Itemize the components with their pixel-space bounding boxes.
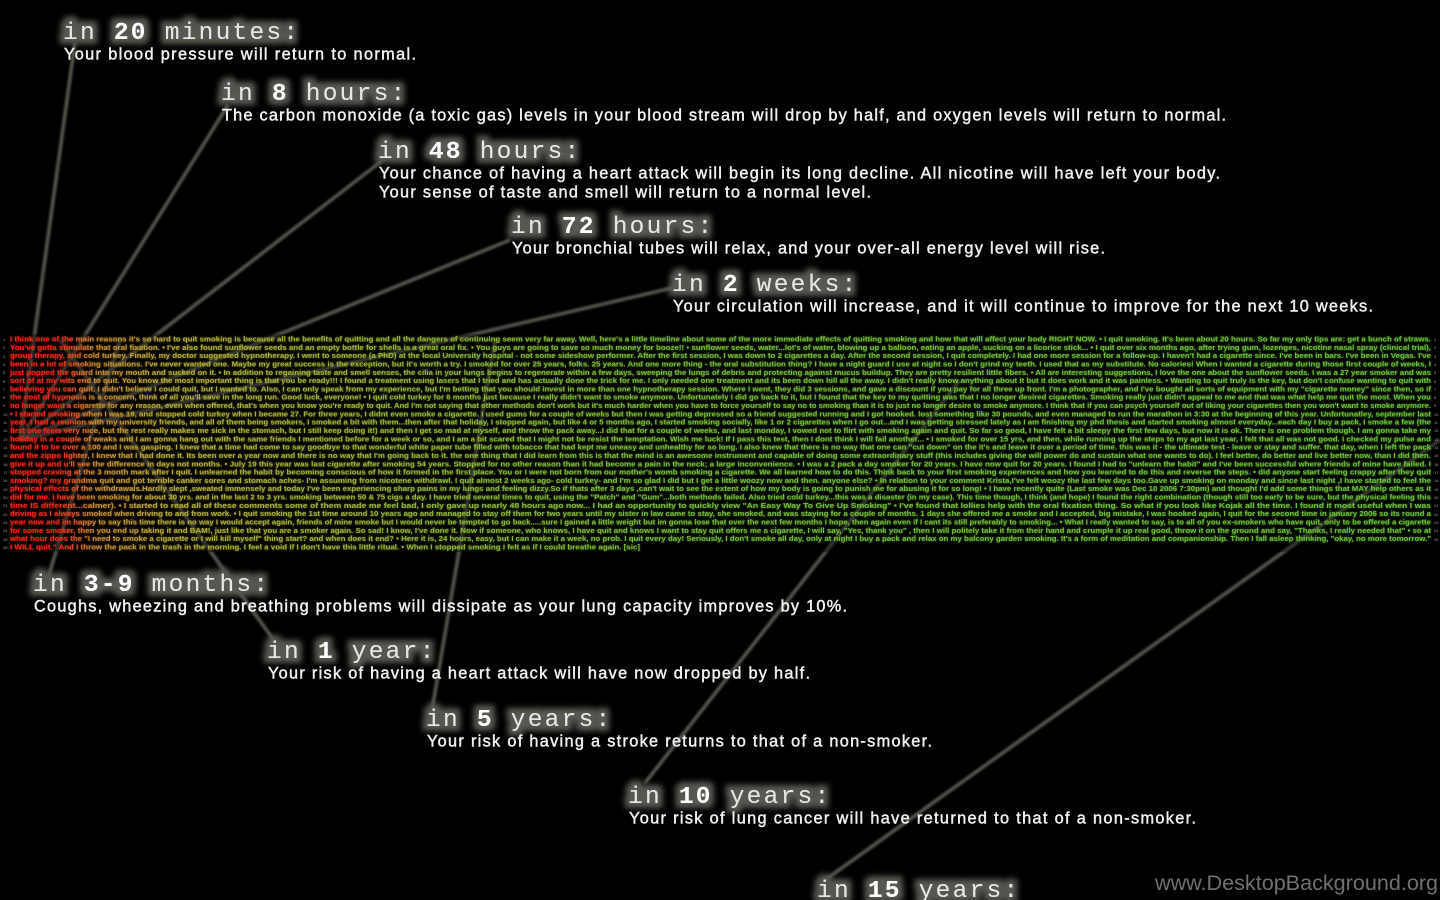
line numbers left: 23 [3,520,8,525]
central quote text block: You've gotta stimulate that oral fixation. • I've also found sunflower seeds and an empty bottle for shells is a great oral fix. • You guys are going to save so much money for booze!! • sunflower seeds, water...lot's of water, blowing up a balloon, eating an apple, sucking on a licorice stick... • I quit over six months ago, after trying gum, lozenges, nicotine nasal spray (clinical trial), [10,343,1431,352]
central quote text block: driving as I always smoked when driving to and from work. • I quit smoking the 1st time around 10 years ago and managed to stay off them for two years until my sister in law came to stay, she smoked, and was staying for a couple of months. 1 days she offered me a smoke and I accepted, big mistake, I was hooked again, I quit for the second time in january 2006 so its round a [10,509,1432,518]
line numbers right: 18 [1434,478,1439,483]
line numbers right: 21 [1434,503,1439,508]
line numbers left: 13 [3,437,8,442]
line numbers right: 12 [1434,428,1439,433]
milestone: in 10 years: in 10 years: [628,784,831,811]
milestone: in 48 hours: Your chance of having a heart attack will begin its long decline. All nicotine will have left your body. [379,164,1220,182]
milestone: in 1 year: in 1 year: [267,639,437,666]
line numbers right: 19 [1434,487,1439,492]
central quote text block: what hour does the "I need to smoke a cigarette or I will kill myself" thing start? and when does it end? • Here it is, 24 hours, easy, but I can make it a week, no prob. I quit every day! Seriously, I don't smoke all day, only at night I buy a pack and relax on my balcony garden smoking. It's a form of meditation and companionship. Then I fall asleep thinking, "okay, no more tomorrow." [9,534,1431,543]
central quote text block: stopped craving at the 3 month mark after I quit. I unlearned the habit by becoming conscious of how it formed in the first place. You or I were not born from our mother's womb smoking a cigarette. We all learned how to do this. Think back to your first smoking experiences and how you learned to do this and reverse the steps. • did anyone start feeling crappy after they quit [10,468,1431,477]
milestone: in 20 minutes: in 20 minutes: [63,20,300,47]
line numbers left: 20 [3,495,8,500]
line numbers right: 15 [1434,453,1439,458]
line numbers right: 17 [1434,470,1439,475]
line numbers left: 9 [3,403,6,408]
central quote text block: year, I had a reunion with my university friends, and all of them being smokers, I smoked a bit with them...then after that holiday, I stopped again, but like 4 or 5 months ago, I started smoking socially, like 1 or 2 cigarettes when I go out...and I was getting stressed lately as I am finishing my phd thesis and started smoking almost everyday...each day I buy a pack, I smoke a few (the [10,418,1431,427]
line numbers right: 2 [1434,345,1437,350]
milestone: in 5 years: Your risk of having a stroke returns to that of a non-smoker. [427,732,932,750]
line numbers right: 23 [1434,520,1439,525]
milestone: in 8 hours [221,81,1226,124]
line numbers left: 17 [3,470,8,475]
line numbers left: 12 [3,428,8,433]
milestone: in 72 hours: Your bronchial tubes will relax, and your over-all energy level will rise. [512,240,1105,258]
milestone: in 8 hours: The carbon monoxide (a toxic gas) levels in your blood stream will drop by half, and oxygen levels will return to normal. [222,106,1226,124]
central quote text block: group therapy, and cold turkey. Finally, my doctor suggested hypnotherapy. I went to someone (a PhD) at the local University hospital - not some sideshow performer. After the first session, I was down to 2 cigarettes a day. After the second session, I quit completely. I had one more session for a follow-up. I haven't had a cigarette since. I've been in bars. I've been in Vegas. I've [10,351,1431,360]
line numbers right: 7 [1434,387,1437,392]
milestone: in 48 hours: Your sense of taste and smell will return to a normal level. [379,184,871,202]
milestone: in 3-9 months: in 3-9 months: [33,572,270,599]
line numbers left: 10 [3,412,8,417]
line numbers left: 4 [3,362,6,367]
line numbers right: 13 [1434,437,1439,442]
line numbers left: 7 [3,387,6,392]
central quote text block: did for me. I have been smoking for about 30 yrs. and in the last 2 to 3 yrs. smoking between 50 & 75 cigs a day. I have tried several times to quit, using the "Patch" and "Gum"...both methods failed. Also tried cold turkey...this was a disaster (in my case). This time though, I think (and hope) I found the right combination (though still too early to be sure, but the physical feeling this [10,492,1431,502]
line numbers left: 2 [3,345,6,350]
milestone: in 8 hours: in 8 hours: [221,81,407,108]
line numbers right: 16 [1434,462,1439,467]
central quote text block: no longer want a cigarette for any reason, even when offered, that's when you know you're ready to quit. And I'm not saying that other methods don't work but it's much harder when you have to force yourself to say no to smoking than it is to just no longer desire to smoke anymore. I think that if you can psych yourself out of liking your cigarettes then you won't want to smoke anymore. [10,401,1431,410]
milestone: in 20 minutes: Your blood pressure will return to normal. [64,46,416,64]
dark veil dimming the lines behind the text block [0,334,1440,552]
central quote text block: and the zippo lighter, I knew that I had done it. Its been over a year now and there is no way that I'm going back to it. the one thing that I did learn from this is that the mind is an awesome instrument and capable of doing some extraordinary stuff (this includes giving the will power do and sustain what one wants to do). I feel better, do better and live better now, than I did then. [10,451,1431,460]
milestone: in 5 years: in 5 years: [426,707,612,734]
line numbers right: 10 [1434,412,1439,417]
central quote text block: holiday in a couple of weaks and I am gonna hang out with the same friends I mentioned before for a week or so, and I am a bit scared that I might not be resist the temptation. Wish me luck! If I pass this test, then I dont think I will fail another... • I smoked for over 15 yrs, and then, while running up the steps to my apt last year, I felt that all was not good. I checked my pulse and [10,434,1431,443]
line numbers left: 22 [3,512,8,517]
milestone: in 1 year [267,639,810,682]
milestone: in 48 hours: in 48 hours: [378,139,581,166]
line numbers right: 5 [1434,370,1437,375]
milestone: in 2 weeks [672,272,1373,316]
milestone: in 2 weeks: Your circulation will increase, and it will continue to improve for the next 10 weeks. [673,298,1373,316]
line numbers left [3,337,8,550]
central quote text block: smoking? my grandma quit and got terrible canker sores and stomach aches- I'm assuming from nicotene withdrawl. I quit almost 2 weeks ago- cold turkey- and I'm so glad I did but I get a little woozy now and then. anyone else? • In relation to your comment Krista,I've felt woozy the last few days too.Gave up smoking on monday and since last night ,I have started to feel the [10,476,1431,485]
line numbers left: 11 [3,420,8,425]
central quote text block: • I started smoking when I was 19, and stopped cold turkey when I became 27. For three years, I didnt even smoke a cigarette. I used gums for a couple of weeks but then I was getting depressed so a friend suggested running and I got hooked. lost something like 30 pounds, and even managed to run the marathon in 3:30 at the beginning of this year. Unfortunatley, september last [10,409,1431,418]
watermark: www.DesktopBackground.org [1154,871,1438,895]
central quote text block: been in a lot of smoking situations. I've never wanted one. Maybe my great success is the exception, but it's worth a try. I smoked for over 25 years, folks. 25 years. And one more thing - the oral substitution thing? I have a night guard I use at night so I don't grind my teeth. I used that as my substitute. No calories! When I wanted a cigarette during those first couple of weeks, I [10,360,1431,368]
milestone: in 3-9 months: Coughs, wheezing and breathing problems will dissipate as your lung capacity improves by 10%. [34,598,847,616]
line numbers left: 19 [3,487,8,492]
central quote text block: time IS different...calmer). • I started to read all of these comments some of them made me feel bad, I only gave up nearly 48 hours ago now... I had an opportunity to quickly view "An Easy Way To Give Up Smoking" • I've found that lollies help with the oral fixation thing. So what if you look like Kojak all the time. I found it most useful when I was [10,501,1431,510]
line numbers right: 20 [1434,495,1439,500]
central quote text block: believing you can quit. I didn't believe I could quit, but I wanted to. Also, I can only speak from my experience, but I'm betting that you should invest in more than one hypnotherapy session. Where I went, they did 3 sessions, and gave a discount if you pay for all three up front. I'm a photographer, and I've bought all sorts of equipment with my "cigarette money" since then, so if [10,384,1431,393]
line numbers right: 3 [1434,354,1437,359]
line numbers left: 14 [3,445,8,450]
milestone: in 2 weeks: in 2 weeks: [672,272,858,299]
central quote text block: sort of at my wits end to quit. You know the most important thing is that you be ready!!! I found a treatment using lasers that I tried and has actually done the trick for me. I only needed one treatment and its been down hill all the away. I didn't really know anything about it but it does work and it was painless. • Wanting to quit truly is the key, but don't confuse wanting to quit with [10,376,1431,385]
line numbers left: 6 [3,379,6,384]
milestone: in 72 hours [511,214,1105,258]
line numbers left: 18 [3,478,8,483]
line numbers right: 9 [1434,403,1437,408]
milestone: in 72 hours: in 72 hours: [511,214,714,241]
line numbers right: 14 [1434,445,1439,450]
line numbers left: 16 [3,462,8,467]
central quote text block: just popped the guard into my mouth and sucked on it. • In addition to regaining taste and smell senses, the cilia in your lungs begins to regenerate within a few days, sweeping the lungs of debris and protecting against mucus buildup. They are pretty resilient little fibers. • All are interesting suggestions, I love the one about the sunflower seeds. I was a 27 year smoker and was [9,368,1431,377]
line numbers right: 11 [1434,420,1439,425]
line numbers left: 1 [3,337,6,342]
line numbers right: 8 [1434,395,1437,400]
line numbers left: 5 [3,370,6,375]
central quote text block [9,334,1432,551]
milestone: in 1 year: Your risk of having a heart attack will have now dropped by half. [268,664,810,682]
line numbers right: 4 [1434,362,1437,367]
central quote text block: physical effects of the withdrawals.Hardly slept ,sweated immensely and today I've been experiencing sharp pains in my lungs and feeling dizzy.So if thats after 3 days ,can't wait to see the extent of how my body is going to punish me for abusing it for so long! • I have recently quite (Last smoke was Dec 10 2006 7:30pm) and thought I'd add some things that MAY help others as it [10,484,1431,493]
central quote text block: give it up and u'll see the difference in days not months. • July 19 this year was last cigarette after smoking 54 years. Stopped for no other reason than it had become a pain in the neck; a large inconvenience. • I was a 2 pack a day smoker for 20 years. I have now quit for 20 years. I found I had to "unlearn the habit" and I've been successful where friends of mine have failed. I [10,459,1431,468]
milestone: in 3-9 months [33,572,847,616]
line numbers right: 22 [1434,512,1439,517]
line numbers right: 1 [1434,337,1437,342]
central quote text block: for some smoker, then you end up taking it and BAM!, just like that you are a smoker again. So sad! I know, I've done it. Now if someone, who knows, I have quit and knows I want to stay quit offers me a cigarette, I will say, "Yes, thank you" , then I will politely take it from their hand and crumple it up real good, throw it on the ground and say, "Thanks, I really needed that" • so at [10,526,1431,535]
line numbers left: 21 [3,503,8,508]
milestone: in 20 minutes [63,20,416,64]
line numbers left: 25 [3,537,8,542]
line numbers left: 26 [3,545,8,550]
line numbers right [1434,337,1439,542]
line numbers left: 8 [3,395,6,400]
line numbers right: 25 [1434,537,1439,542]
line numbers right: 6 [1434,379,1437,384]
central quote text block: year now and im happy to say this time there is no way I would accept again, friends of mine smoke but I would never be tempted to go back.....sure I gained a little weight but im gonna lose that over the next few months I hope, then again even if I cant its still preferably to smoking... • What I really wanted to say, is to all of you ex-smokers who have quit, only to be offered a cigarette [10,518,1431,526]
milestone: in 10 years: Your risk of lung cancer will have returned to that of a non-smoker. [629,810,1196,828]
milestone: in 48 hours [378,139,1220,202]
central quote text block: the cost of hypnosis is a concern, think of all you'll save in the long run. Good luck, everyone! • I quit cold turkey for 6 months just because I really didn't want to smoke anymore. Unfortunately I did go back to it, but I found that the key to my quitting was that I no longer desired cigarettes. Smoking really just didn't appeal to me and that was what help me quit the most. When you [10,393,1431,402]
line numbers left: 15 [3,453,8,458]
line numbers right: 24 [1434,528,1439,533]
central quote text block: I WILL quit." And I throw the pack in the trash in the morning. I feel a void if I don't have this little ritual. • When I stopped smoking I felt as if I could breathe again. [sic] [10,542,640,551]
central quote text block: first one feels very nice, but the rest really makes me sick in the stomach, but I still keep doing it!) and then I get so mad at myself, and throw the pack away...I did that for a couple of weeks, and last monday, I vowed not to flirt with smoking again and quit. So far so good, I have felt a bit sleepy the first few days, but now it is ok. There is one problem though. I am gonna take my [10,426,1432,435]
central quote text block: found it to be over a 100 and I was gasping. I knew that a time had come to say goodbye to that wonderful white paper tube filled with tobacco that had kept me uneasy and unhealthy for so long. I also knew that there is no way that one can "cut down" on the it's and leave it over a period of time. this was it - the ultimate test - leave or stay and suffer. that day, when I left the pack [10,443,1432,452]
milestone: in 5 years [426,707,932,750]
line numbers left: 3 [3,354,6,359]
milestone: in 10 years [628,784,1196,828]
central quote text block: I think one of the main reasons it's so hard to quit smoking is because all the benefits of quitting and all the dangers of continuing seem very far away. Well, here's a little timeline about some of the more immediate effects of quitting smoking and how that will affect your body RIGHT NOW. • I quit smoking. It's been about 20 hours. So far my only tips are: get a bunch of straws. [10,334,1431,344]
line numbers left: 24 [3,528,8,533]
